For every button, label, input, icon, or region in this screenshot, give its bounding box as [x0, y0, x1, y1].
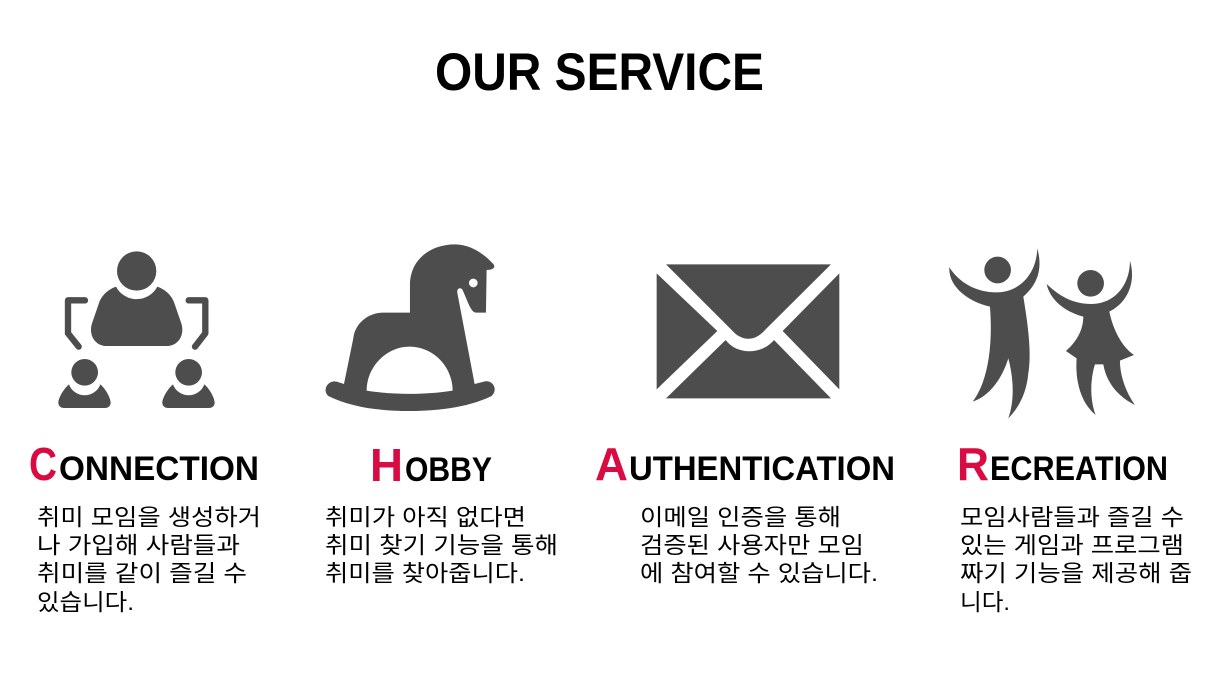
text block: connection description — [37, 504, 261, 615]
text block: hobby description — [325, 504, 558, 586]
title: OUR SERVICE — [435, 43, 764, 102]
icon: connected people — [58, 251, 215, 408]
text block: connection description: 나 가입해 사람들과 — [37, 532, 240, 558]
panel: authentication — [595, 264, 895, 586]
text block: recreation description: 모임사람들과 즐길 수 — [960, 504, 1184, 530]
heading: authentication — [595, 438, 895, 490]
text block: recreation description: 짜기 기능을 제공해 줍 — [960, 560, 1192, 586]
text block: authentication description: 이메일 인증을 통해 — [640, 504, 841, 530]
panel: recreation — [949, 248, 1192, 615]
panel: connection — [29, 251, 261, 615]
heading: connection: C — [29, 438, 57, 490]
text block: recreation description: 니다. — [960, 589, 1010, 615]
heading: connection: ONNECTION — [59, 450, 259, 488]
text block: hobby description: 취미가 아직 없다면 — [325, 504, 526, 530]
icon: rocking horse — [326, 244, 495, 411]
heading: recreation: R — [957, 438, 989, 490]
text block: hobby description: 취미 찾기 기능을 통해 — [325, 532, 558, 558]
text block: connection description: 취미를 같이 즐길 수 — [37, 560, 247, 586]
text block: recreation description — [960, 504, 1192, 615]
heading: authentication: UTHENTICATION — [629, 450, 895, 488]
heading: authentication: A — [595, 438, 628, 490]
heading: hobby: OBBY — [405, 451, 492, 489]
text block: hobby description: 취미를 찾아줍니다. — [325, 560, 525, 586]
text block: connection description: 있습니다. — [37, 589, 134, 615]
text block: recreation description: 있는 게임과 프로그램 — [960, 532, 1184, 558]
icon: envelope — [657, 264, 839, 398]
heading: connection — [29, 438, 259, 490]
panel: hobby — [325, 244, 558, 586]
text block: authentication description: 에 참여할 수 있습니다. — [640, 560, 878, 586]
text block: authentication description: 검증된 사용자만 모임 — [640, 532, 864, 558]
text block: connection description: 취미 모임을 생성하거 — [37, 504, 261, 530]
heading: recreation — [957, 438, 1168, 490]
heading: recreation: ECREATION — [990, 450, 1168, 488]
heading: hobby: H — [370, 439, 403, 491]
heading: hobby — [370, 439, 492, 491]
icon: jumping people — [949, 248, 1135, 418]
text block: authentication description — [640, 504, 878, 586]
